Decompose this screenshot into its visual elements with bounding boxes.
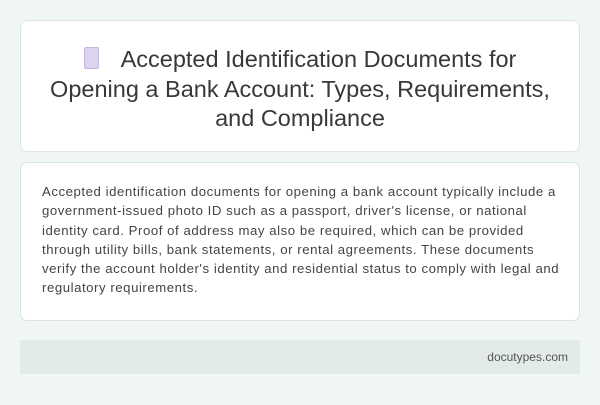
footer bar bbox=[20, 340, 580, 374]
title: Accepted Identification Documents for Opening a Bank Account: Types, Requirements, and Compliance bbox=[50, 46, 550, 131]
icon: document bbox=[84, 47, 99, 69]
description text: Accepted identification documents for opening a bank account typically include a government-issued photo ID such as a passport, driver's license, or national identity card. Proof of address may also be required, which can be provided through utility bills, bank statements, or rental agreements. These documents verify the account holder's identity and residential status to comply with legal and regulatory requirements. bbox=[42, 184, 559, 295]
description card bbox=[20, 162, 580, 321]
footer source: docutypes.com bbox=[487, 350, 568, 364]
title card bbox=[20, 20, 580, 152]
